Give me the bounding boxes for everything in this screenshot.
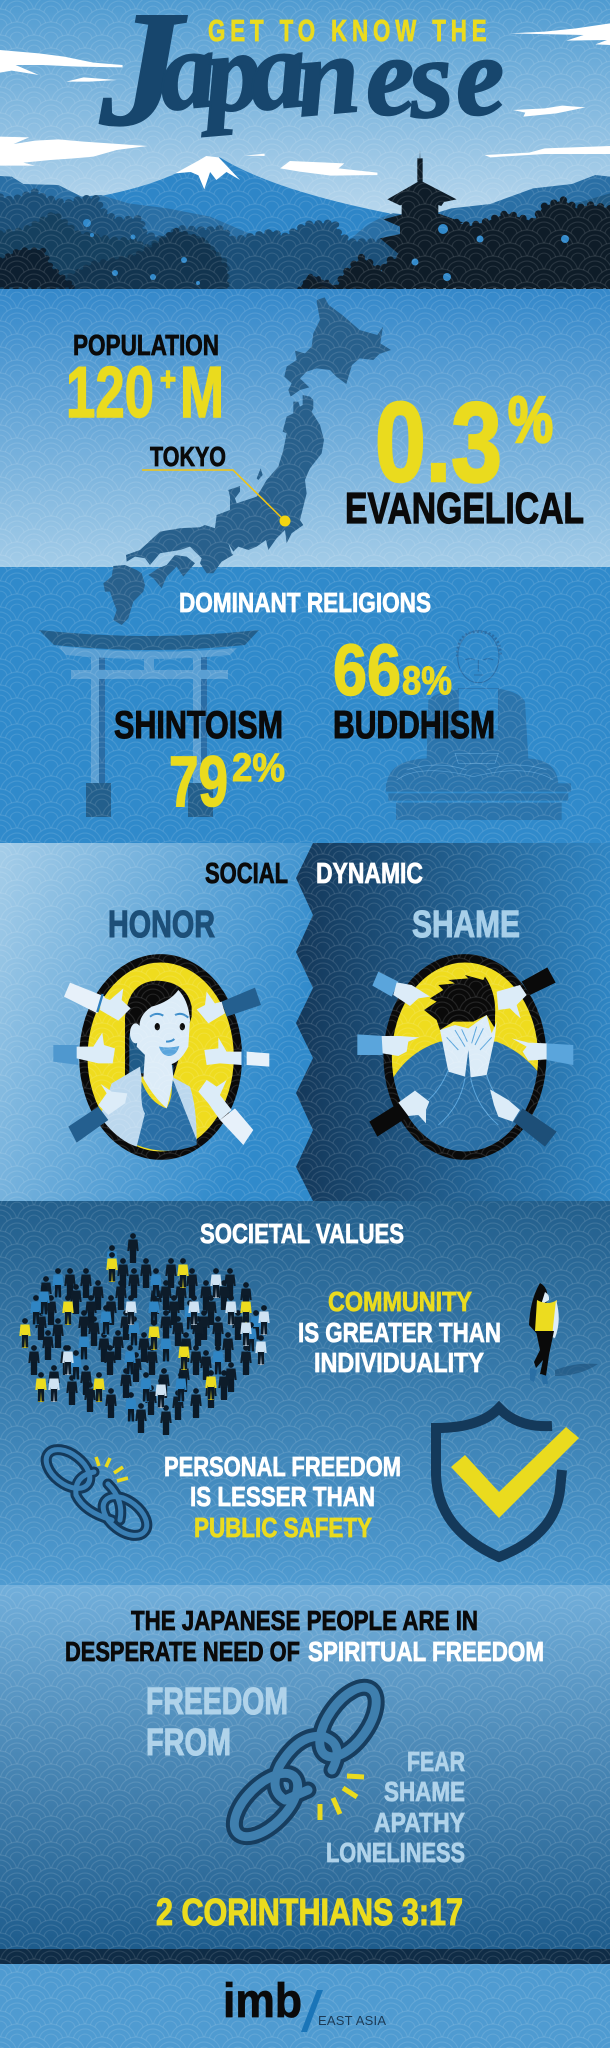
title: get to know the: GET TO KNOW THE bbox=[208, 13, 487, 48]
Tokyo pointer bbox=[142, 470, 290, 526]
freedom list bbox=[326, 1746, 465, 1868]
Buddhism percent: 66 bbox=[333, 631, 401, 711]
Tokyo label: TOKYO bbox=[150, 441, 226, 472]
spiritual freedom statement: THE JAPANESE PEOPLE ARE IN bbox=[131, 1605, 478, 1636]
panel: footer background bbox=[0, 1964, 610, 2048]
personal freedom text bbox=[164, 1451, 401, 1543]
IMB East Asia logo: imb bbox=[223, 1975, 302, 2028]
shield with check mark bbox=[436, 1408, 579, 1557]
Shintoism percent: 2% bbox=[232, 746, 285, 790]
heading: dynamic: DYNAMIC bbox=[316, 858, 423, 890]
thumbs-up hands around honor oval bbox=[53, 983, 269, 1145]
Shintoism percent bbox=[169, 743, 285, 822]
panel: religions background bbox=[0, 567, 610, 843]
shame oval with man bbox=[387, 958, 547, 1163]
freedom list: LONELINESS bbox=[326, 1837, 465, 1868]
Shintoism label: SHINTOISM bbox=[114, 704, 283, 747]
heading: social: SOCIAL bbox=[205, 858, 288, 890]
map of Japan bbox=[103, 297, 391, 625]
Shintoism percent: 79 bbox=[169, 743, 228, 822]
freedom list: FEAR bbox=[407, 1746, 465, 1777]
heading: dominant religions: DOMINANT RELIGIONS bbox=[179, 587, 431, 618]
community text bbox=[298, 1286, 501, 1378]
pointing hands around shame oval bbox=[357, 967, 573, 1147]
panel: social dynamic honor side bbox=[0, 843, 313, 1201]
spiritual freedom statement: SPIRITUAL FREEDOM bbox=[308, 1636, 544, 1667]
panel: population background bbox=[0, 289, 610, 567]
population figure: M bbox=[180, 353, 224, 433]
panel: spiritual freedom background bbox=[0, 1585, 610, 1949]
community text: IS GREATER THAN bbox=[298, 1317, 501, 1348]
Buddhism percent: 8% bbox=[402, 659, 452, 703]
spiritual freedom statement: DESPERATE NEED OF bbox=[65, 1636, 300, 1667]
panel: header sky bbox=[0, 0, 610, 290]
forest silhouettes bbox=[0, 192, 401, 289]
leaf gaps in the trees bbox=[83, 219, 569, 285]
pagoda and dark tree mass bbox=[300, 150, 610, 288]
Buddha statue bbox=[386, 631, 571, 820]
panel: societal values background bbox=[0, 1201, 610, 1585]
population label: POPULATION bbox=[73, 330, 219, 362]
Buddhism label: BUDDHISM bbox=[333, 704, 495, 747]
heading: societal values: SOCIETAL VALUES bbox=[200, 1218, 404, 1249]
freedom list: APATHY bbox=[374, 1807, 465, 1838]
torii gate bbox=[39, 630, 259, 817]
clouds bbox=[0, 23, 610, 176]
large broken chain bbox=[224, 1678, 387, 1847]
broken chain icon bbox=[39, 1442, 154, 1543]
dark divider band bbox=[0, 1949, 610, 1964]
mountains: Fuji and ranges bbox=[0, 156, 610, 289]
title: Japanese: apanese bbox=[154, 6, 510, 143]
spiritual freedom statement bbox=[65, 1605, 544, 1667]
panel: social dynamic shame side bbox=[296, 843, 610, 1201]
freedom list: SHAME bbox=[384, 1776, 465, 1807]
crowd of people bbox=[19, 1233, 270, 1435]
personal freedom text: IS LESSER THAN bbox=[190, 1481, 375, 1512]
community text: INDIVIDUALITY bbox=[314, 1347, 484, 1378]
community text: COMMUNITY bbox=[328, 1286, 472, 1317]
Buddhism percent bbox=[333, 631, 452, 711]
population figure: 120 bbox=[66, 353, 154, 433]
evangelical percentage: % bbox=[508, 383, 553, 456]
IMB East Asia logo bbox=[223, 1975, 386, 2032]
scripture reference: 2 CORINTHIANS 3:17 bbox=[156, 1892, 463, 1934]
personal freedom text: PUBLIC SAFETY bbox=[194, 1512, 372, 1543]
honor oval with woman bbox=[83, 958, 238, 1156]
IMB East Asia logo: EAST ASIA bbox=[318, 2013, 386, 2028]
personal freedom text: PERSONAL FREEDOM bbox=[164, 1451, 401, 1482]
freedom from text bbox=[146, 1681, 288, 1764]
freedom from text: FREEDOM bbox=[146, 1681, 288, 1723]
lone woman bbox=[529, 1283, 598, 1384]
population figure: + bbox=[160, 361, 176, 397]
evangelical percentage: 0.3 bbox=[375, 379, 502, 505]
honor label: HONOR bbox=[108, 904, 215, 946]
shame label: SHAME bbox=[412, 904, 520, 946]
freedom from text: FROM bbox=[146, 1722, 231, 1764]
